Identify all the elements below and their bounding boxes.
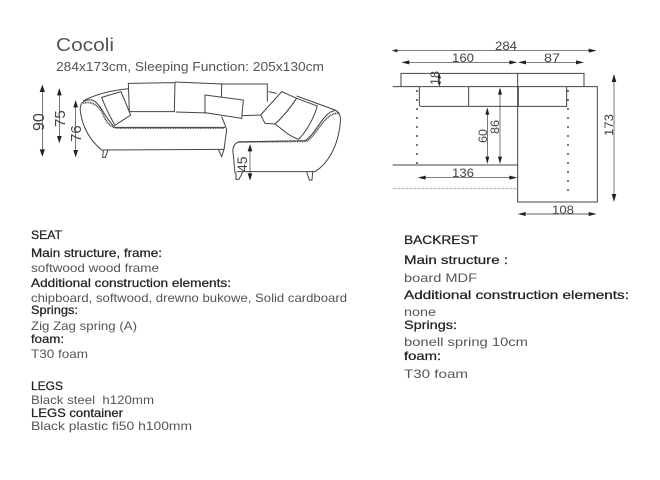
text block: seat: Zig Zag spring (A) — [31, 319, 137, 333]
text block: seat: foam: — [31, 332, 64, 346]
text block: backrest: Main structure : — [404, 253, 508, 267]
plan outline — [393, 73, 597, 202]
text block: seat: Main structure, frame: — [31, 246, 162, 260]
floor plan drawing — [392, 49, 616, 216]
text block: seat: Additional construction elements: — [31, 276, 231, 290]
text block: legs: LEGS container — [31, 406, 123, 420]
text block: backrest: Springs: — [404, 318, 457, 332]
plan dimension labels: 86 — [488, 120, 502, 134]
height labels — [31, 110, 250, 172]
plan dimension labels: 136 — [452, 166, 474, 180]
text block: seat: T30 foam — [31, 347, 88, 361]
dimension arrows — [40, 85, 252, 181]
text block: backrest — [404, 233, 629, 381]
text block: legs — [31, 379, 192, 433]
plan dimension labels: 173 — [602, 114, 616, 136]
plan dimension labels: 108 — [552, 203, 574, 217]
text block: seat — [31, 228, 347, 361]
plan dimension labels: 18 — [428, 71, 442, 85]
text block: seat: chipboard, softwood, drewno bukowe, Solid cardboard — [31, 291, 347, 305]
plan dimension labels: 284 — [495, 39, 517, 53]
plan dimension labels: 160 — [452, 51, 474, 65]
plan arrows — [392, 49, 616, 216]
text block: backrest: bonell spring 10cm — [404, 335, 528, 349]
height labels: 75 — [52, 110, 69, 127]
text block: backrest: BACKREST — [404, 233, 479, 247]
plan dimension labels — [428, 39, 616, 217]
text block: legs: Black steel h120mm — [31, 393, 154, 407]
text block: backrest: T30 foam — [404, 367, 468, 381]
text block: legs: LEGS — [31, 379, 63, 393]
height labels: 76 — [68, 125, 85, 142]
text block: backrest: none — [404, 305, 436, 319]
text block: backrest: foam: — [404, 349, 441, 363]
title: Cocoli — [56, 35, 114, 55]
text block: backrest: board MDF — [404, 271, 477, 285]
plan dimension labels: 60 — [476, 129, 490, 143]
text block: backrest: Additional construction elements: — [404, 288, 629, 302]
sofa side drawing — [40, 82, 340, 181]
text block: seat: SEAT — [31, 228, 63, 242]
plan dimension labels: 87 — [544, 51, 560, 65]
text block: legs: Black plastic fi50 h100mm — [31, 419, 192, 433]
subtitle: dimensions: 284x173cm, Sleeping Function: 205x130cm — [56, 59, 324, 74]
height labels: 45 — [234, 156, 250, 172]
height labels: 90 — [31, 113, 48, 131]
dashed lines — [393, 90, 568, 197]
text block: seat: Springs: — [31, 303, 78, 317]
woven arm trim — [83, 102, 339, 142]
sofa outline — [80, 82, 340, 180]
text block: seat: softwood wood frame — [31, 261, 159, 275]
